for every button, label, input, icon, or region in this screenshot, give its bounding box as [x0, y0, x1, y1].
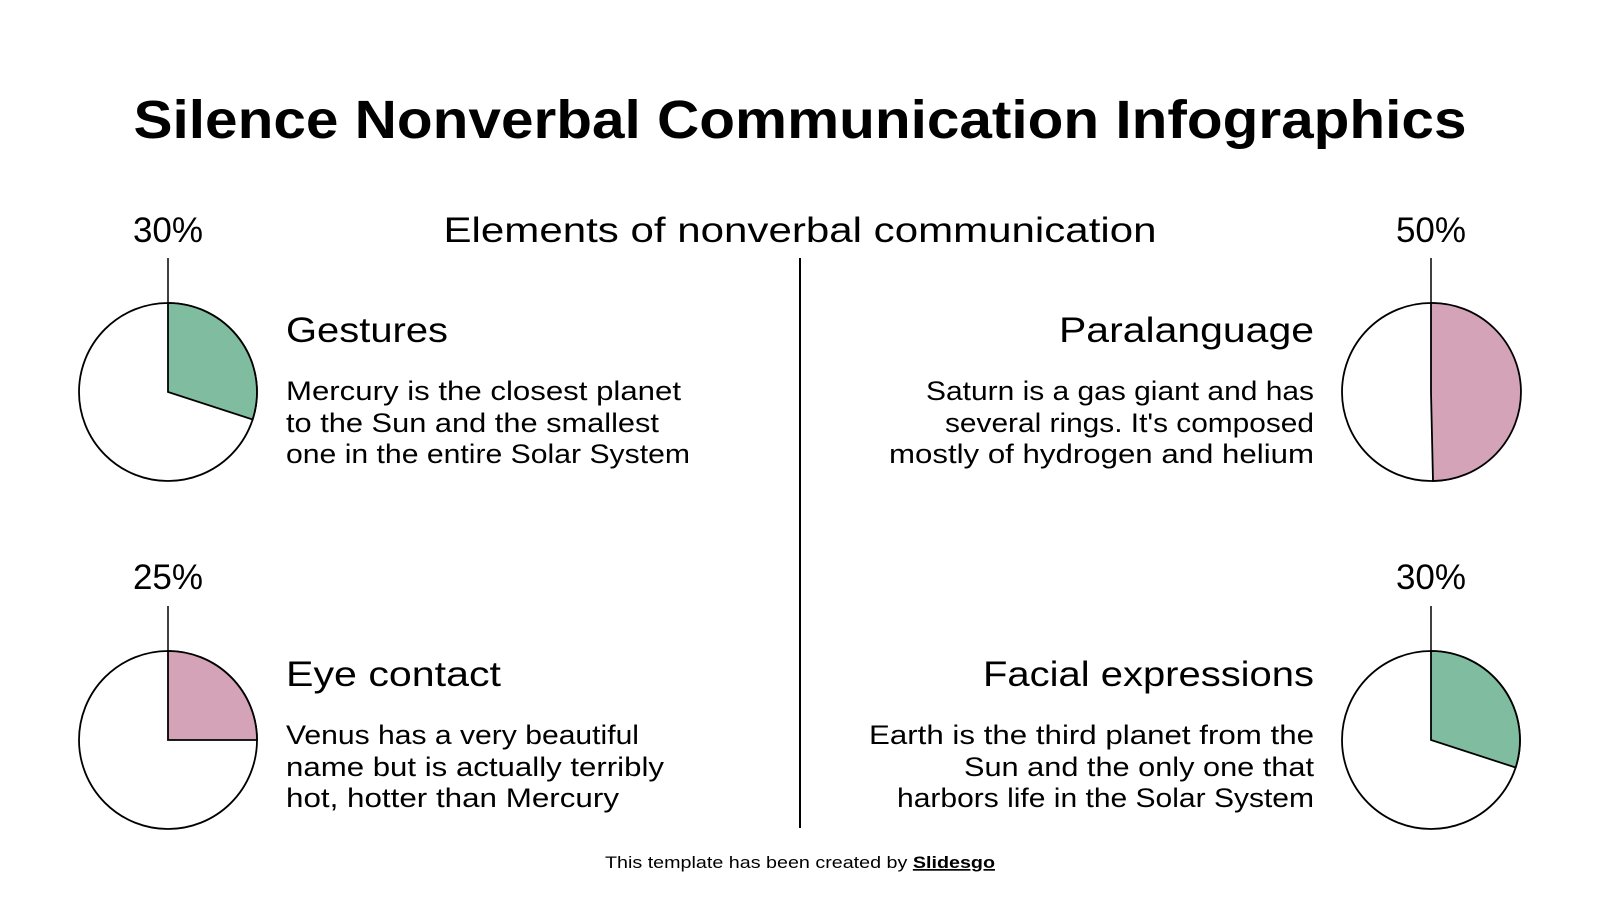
panel: paralanguage	[889, 211, 1521, 481]
percentage 25%: 25%	[133, 558, 203, 597]
body text: Sun and the only one that	[964, 752, 1315, 782]
heading: Eye contact	[286, 655, 501, 694]
percentage 30%: 30%	[133, 211, 203, 250]
body text: Saturn is a gas giant and has	[926, 376, 1314, 406]
heading: Gestures	[286, 311, 448, 350]
footer credit: This template has been created by Slidesgo	[605, 853, 995, 872]
heading: Paralanguage	[1059, 311, 1314, 350]
panel: eye contact	[79, 558, 665, 829]
percentage 30%: 30%	[1396, 558, 1466, 597]
pie chart 30%	[1342, 651, 1520, 829]
body text: name but is actually terribly	[286, 752, 665, 782]
pie chart 25%	[79, 651, 257, 829]
panel: facial expressions	[869, 558, 1520, 829]
subtitle: Elements of nonverbal communication	[444, 211, 1156, 250]
body text: several rings. It's composed	[945, 408, 1314, 438]
body text: Earth is the third planet from the	[869, 720, 1314, 750]
panel: gestures	[79, 211, 690, 481]
title: Silence Nonverbal Communication Infographics	[134, 90, 1466, 150]
body text: harbors life in the Solar System	[897, 783, 1314, 813]
pie chart 30%	[79, 303, 257, 481]
pie chart 50%	[1342, 303, 1521, 481]
body text: Mercury is the closest planet	[286, 376, 682, 406]
heading: Facial expressions	[983, 655, 1314, 694]
percentage 50%: 50%	[1396, 211, 1466, 250]
body text: to the Sun and the smallest	[286, 408, 660, 438]
body text: Venus has a very beautiful	[286, 720, 639, 750]
body text: mostly of hydrogen and helium	[889, 439, 1314, 469]
body text: one in the entire Solar System	[286, 439, 690, 469]
body text: hot, hotter than Mercury	[286, 783, 620, 813]
